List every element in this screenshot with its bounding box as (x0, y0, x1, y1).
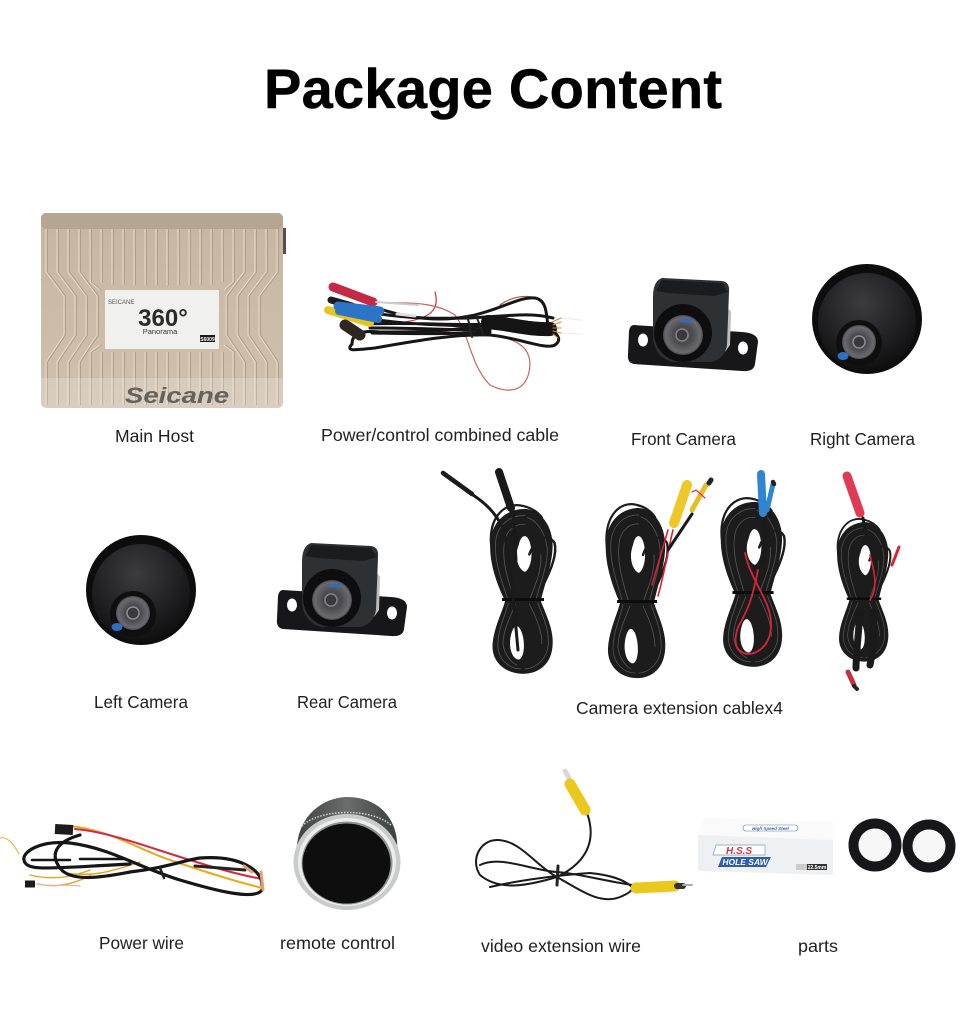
host label plate: Panorama (143, 327, 178, 336)
hole saw box: H.S.S (726, 846, 752, 857)
cable 4 (red plug) (837, 476, 899, 689)
item: video extension wire (476, 771, 692, 899)
label: rear camera: Rear Camera (297, 692, 397, 712)
host label plate (105, 290, 219, 349)
label: power wire: Power wire (99, 933, 184, 953)
label: video extension wire: video extension wire (481, 936, 641, 956)
item: left camera (86, 535, 196, 645)
host label plate: S6009 (200, 337, 215, 343)
label: right camera: Right Camera (810, 429, 915, 449)
cable 2 (yellow plugs) (606, 480, 711, 678)
item: power wire (0, 826, 263, 895)
item: rear camera (277, 543, 407, 636)
label: camera extension cables: Camera extension cablex4 (576, 698, 783, 718)
cable 3 (blue plugs) (721, 474, 785, 667)
cable 1 (corrugated) (443, 472, 555, 674)
knob face (302, 824, 390, 904)
host label plate: SEICANE (108, 300, 134, 306)
item: main host (41, 213, 286, 408)
label: front camera: Front Camera (631, 429, 736, 449)
hole saw box (698, 818, 833, 875)
label: parts: parts (798, 936, 838, 956)
item: front camera (628, 278, 758, 371)
title: Package Content (264, 57, 722, 120)
hole saw box: HOLE SAW (722, 857, 769, 867)
item: right camera (812, 264, 922, 374)
hole saw box: 22.5mm (808, 865, 827, 871)
label: main host: Main Host (115, 426, 194, 446)
rubber rings (854, 824, 950, 868)
item: parts (hole saw box and rubber rings) (698, 818, 950, 875)
item: remote control knob (294, 797, 400, 910)
watermark: Seicane (125, 383, 229, 408)
label: left camera: Left Camera (94, 692, 188, 712)
label: power/control combined cable: Power/control combined cable (321, 425, 559, 445)
item: camera extension cables (443, 472, 899, 689)
item: power/control combined cable (328, 287, 582, 390)
label: remote control: remote control (280, 933, 395, 953)
host label plate: 360° (138, 305, 188, 332)
hole saw box: High Speed Steel (752, 826, 790, 831)
